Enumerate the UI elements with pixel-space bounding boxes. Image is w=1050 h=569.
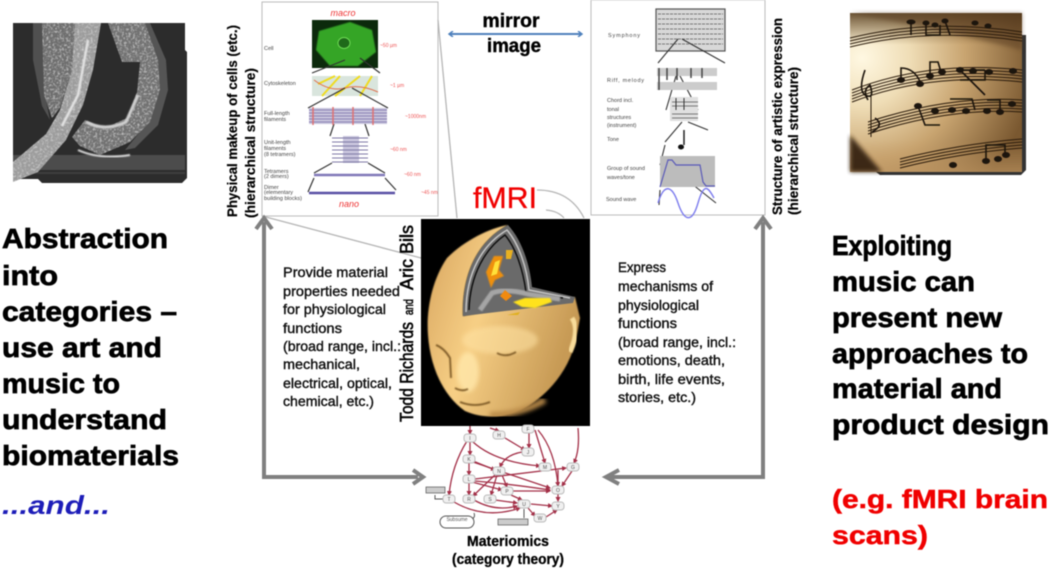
- label: materiomics: Materiomics: [467, 534, 549, 550]
- label: structure of artistic expression: (hierarchical structure): [785, 67, 801, 215]
- diagram: dimer: [309, 192, 395, 194]
- text: provide material properties: mechanical,: [283, 356, 360, 372]
- heading: exploiting music: Exploiting: [832, 230, 952, 261]
- diagram: materiomics category graph: K: [467, 457, 471, 463]
- image: sheet music photograph: [850, 13, 1026, 175]
- diagram: materiomics category graph: R: [467, 497, 471, 503]
- heading: abstraction into categories: Abstraction: [2, 223, 168, 254]
- diagram: materiomics category graph: J: [527, 450, 530, 456]
- heading: exploiting music: [832, 230, 1049, 440]
- image: symphony score: [656, 9, 725, 51]
- arrow: materiomics to cell structure: [256, 218, 423, 484]
- label: materiomics: (category theory): [452, 552, 564, 568]
- labels: size scale: ~50 µm: [380, 43, 397, 49]
- label: physical makeup of cells: Physical makeup of cells (etc.): [224, 25, 240, 217]
- text: express mechanisms: functions: [618, 315, 677, 331]
- diagram: materiomics category graph: Y: [556, 504, 560, 510]
- label: physical makeup of cells: [224, 25, 258, 218]
- text: provide material properties: electrical, optical,: [283, 375, 392, 391]
- labels: music levels: [606, 33, 645, 203]
- heading: abstraction into categories: [2, 223, 179, 471]
- diagram: materiomics category graph: [426, 425, 579, 528]
- text: provide material properties: functions: [283, 320, 342, 336]
- connector lines: zoom guides to brain: [262, 20, 584, 258]
- heading: mirror image: mirror: [482, 11, 540, 32]
- text: express mechanisms: [618, 259, 736, 405]
- diagram: full length filaments: [309, 107, 387, 125]
- heading: exploiting music: present new: [832, 302, 1002, 333]
- heading: exploiting music: material and: [832, 373, 1002, 404]
- text: fMRI: fMRI: [473, 182, 537, 215]
- diagram: materiomics category graph: G: [571, 465, 575, 471]
- labels: hierarchy levels: (elementary: [264, 190, 293, 196]
- heading: abstraction into categories: into: [2, 260, 58, 291]
- text: and (blue): ...and...: [2, 490, 110, 520]
- text: express mechanisms: birth, life events,: [618, 371, 725, 387]
- label: nano: nano: [339, 199, 359, 209]
- label: materiomics: [452, 534, 564, 568]
- image: green cell micrograph: [312, 20, 378, 68]
- graph annotations: [426, 487, 528, 528]
- text: provide material properties: Provide material: [283, 264, 388, 280]
- credit: Todd Richards and Aric Bils: Aric Bils: [397, 225, 417, 290]
- icon: note: [678, 130, 684, 150]
- labels: hierarchy levels: filaments: [264, 117, 286, 123]
- labels: hierarchy levels: Dimer: [264, 185, 279, 191]
- heading: abstraction into categories: categories –: [2, 296, 177, 327]
- diagram: unit length filaments: [332, 136, 368, 163]
- diagram: materiomics category graph: U: [522, 502, 526, 508]
- labels: hierarchy levels: Cell: [264, 46, 273, 52]
- text: express mechanisms: Express: [618, 259, 666, 275]
- image: riff melody staves: [657, 68, 717, 90]
- diagram: materiomics category graph: H: [497, 433, 501, 439]
- text: provide material properties: chemical, etc.): [283, 393, 374, 409]
- heading: exploiting music: approaches to: [832, 338, 1028, 369]
- text: express mechanisms: (broad range, incl.:: [618, 334, 736, 350]
- labels: hierarchy levels: (8 tetramers): [264, 152, 296, 158]
- labels: hierarchy levels: Unit-length: [264, 140, 291, 146]
- heading: exploiting music: music can: [832, 266, 975, 297]
- labels: size scale: ~45 nm: [421, 190, 438, 196]
- diagram: materiomics category graph: W: [538, 516, 543, 522]
- arrow: double headed mirror arrow: [449, 33, 582, 35]
- labels: hierarchy levels: Tetramers: [264, 169, 289, 175]
- heading: mirror image: [482, 11, 541, 57]
- text: provide material properties: properties needed: [283, 283, 400, 299]
- arrow: music structure to materiomics: [606, 218, 771, 484]
- diagram: materiomics category graph: M: [543, 465, 547, 471]
- heading: abstraction into categories: understand: [2, 404, 167, 435]
- credit: Todd Richards and Aric Bils: [397, 225, 417, 422]
- text: express mechanisms: physiological: [618, 297, 699, 313]
- text: provide material properties: for physiological: [283, 301, 386, 317]
- text: provide material properties: [283, 264, 401, 409]
- image: fMRI head scan: [421, 219, 590, 426]
- labels: music levels: waves/tone: [606, 175, 635, 181]
- labels: size scale: ~60 nm: [390, 147, 407, 153]
- text: express mechanisms: emotions, death,: [618, 352, 725, 368]
- diagram: materiomics category graph: L: [468, 477, 471, 483]
- heading: abstraction into categories: biomaterials: [2, 440, 179, 471]
- diagram: materiomics category graph: S: [488, 497, 492, 503]
- text: express mechanisms: stories, etc.): [618, 389, 696, 405]
- text: fMRI brain scans (red): (e.g. fMRI brain: [832, 484, 1048, 514]
- labels: music levels: Sound wave: [606, 197, 636, 203]
- text: express mechanisms: mechanisms of: [618, 278, 713, 294]
- brain cross-section: [463, 225, 575, 316]
- graph nodes: [443, 425, 579, 522]
- chart: sine wave: [658, 188, 714, 218]
- face: [428, 225, 580, 417]
- labels: hierarchy levels: building blocks): [264, 196, 302, 202]
- panel: cell hierarchy: [262, 2, 438, 216]
- labels: music levels: (instrument): [607, 123, 637, 129]
- label: physical makeup of cells: (hierarchical structure): [242, 68, 258, 218]
- label: structure of artistic expression: [769, 18, 801, 215]
- text: provide material properties: (broad range, incl.:: [283, 338, 401, 354]
- diagram: materiomics category graph: N: [497, 469, 501, 475]
- chart: sound wave envelope: [660, 156, 715, 187]
- labels: music levels: tonal: [607, 107, 619, 113]
- labels: music levels: Symphony: [608, 33, 640, 39]
- labels: hierarchy levels: Full-length: [264, 111, 290, 117]
- label: macro: macro: [330, 8, 356, 18]
- labels: hierarchy levels: filaments: [264, 146, 286, 152]
- labels: music levels: Chord incl.: [607, 98, 634, 104]
- heading: mirror image: image: [487, 36, 541, 57]
- text: fMRI brain scans (red): scans): [832, 520, 928, 550]
- diagram: materiomics category graph: O: [556, 488, 560, 494]
- diagram: materiomics category graph: T: [447, 497, 451, 503]
- labels: hierarchy levels: Cytoskeleton: [264, 81, 296, 87]
- labels: size scale: ~60 nm: [404, 172, 421, 178]
- diagram: materiomics category graph: I: [469, 436, 471, 442]
- diagram: materiomics category graph: P: [505, 489, 509, 495]
- credit: Todd Richards and Aric Bils: Todd Richards: [397, 322, 417, 422]
- text: fMRI brain scans (red): [832, 484, 1048, 550]
- labels: size scale: ~1000nm: [405, 114, 426, 120]
- image: chord: [670, 97, 698, 121]
- graph annotations: Subsume: [446, 517, 468, 523]
- heading: abstraction into categories: use art and: [2, 332, 162, 363]
- credit: Todd Richards and Aric Bils: and: [401, 299, 416, 315]
- diagram: materiomics category graph: F: [526, 427, 530, 433]
- labels: music levels: structures: [607, 115, 631, 121]
- labels: music levels: Riff, melody: [607, 78, 644, 84]
- labels: size scale: ~1 µm: [390, 83, 404, 89]
- labels: music levels: Tone: [607, 137, 619, 143]
- diagram: cytoskeleton: [312, 76, 378, 96]
- image: micrograph of looped biological fibre: [13, 23, 187, 183]
- labels: music levels: Group of sound: [607, 166, 645, 172]
- heading: abstraction into categories: music to: [2, 368, 120, 399]
- diagram: tetramer: [314, 174, 385, 176]
- labels: hierarchy levels: (2 dimers): [264, 174, 289, 180]
- label: structure of artistic expression: Structure of artistic expression: [769, 18, 785, 215]
- panel: music hierarchy: [591, 0, 765, 218]
- labels: size scale: [380, 43, 438, 196]
- heading: exploiting music: product design: [832, 409, 1049, 440]
- labels: hierarchy levels: [264, 46, 302, 202]
